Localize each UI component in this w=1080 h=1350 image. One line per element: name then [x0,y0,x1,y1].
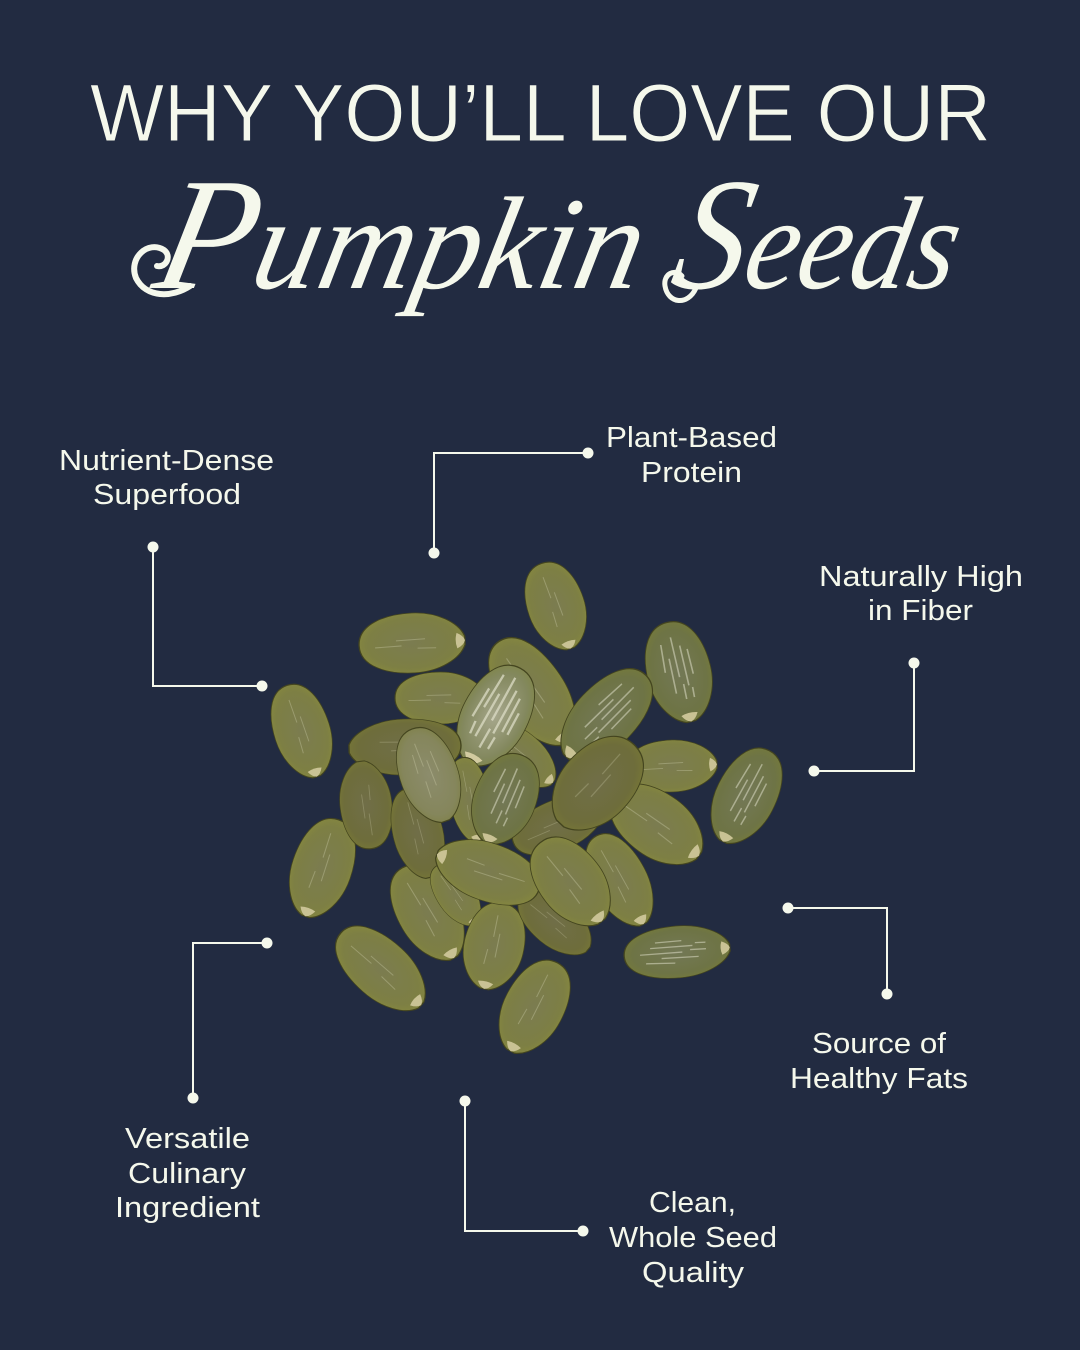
callout: clean whole seed quality [460,1096,777,1289]
connector [148,542,268,692]
label: Protein [641,457,742,489]
callout: versatile culinary ingredient [115,938,272,1224]
label: Whole Seed [609,1222,777,1254]
label [115,1123,260,1224]
label [609,1187,777,1289]
heading: why you'll love our: WHY YOU’LL LOVE OUR [90,68,991,159]
connector [428,448,594,558]
connector [782,902,892,1000]
script heading: pumpkin seeds: Seeds [661,146,980,323]
label: Versatile [125,1123,250,1155]
label [790,1028,968,1095]
script heading: pumpkin seeds [134,146,980,323]
label: Superfood [93,479,241,511]
script heading: pumpkin seeds: Pumpkin [142,146,665,323]
title [90,68,991,323]
connector [808,658,920,776]
label: Ingredient [115,1192,260,1224]
callout: naturally high in fiber [808,561,1023,776]
label: Culinary [128,1158,247,1190]
connector [188,938,272,1104]
pumpkin seed pile [261,554,796,1065]
label: in Fiber [868,595,973,627]
label: Quality [642,1257,745,1289]
label: Nutrient-Dense [59,445,274,477]
label: Source of [812,1028,947,1060]
label: Healthy Fats [790,1063,968,1095]
label [59,445,274,511]
callout: nutrient-dense superfood [59,445,274,692]
label [606,422,777,489]
label: Clean, [649,1187,736,1219]
label: Plant-Based [606,422,777,454]
label: Naturally High [819,561,1023,593]
connector [460,1096,588,1236]
callout: source of healthy fats [782,902,968,1095]
callout: plant-based protein [428,422,777,558]
label [819,561,1023,627]
